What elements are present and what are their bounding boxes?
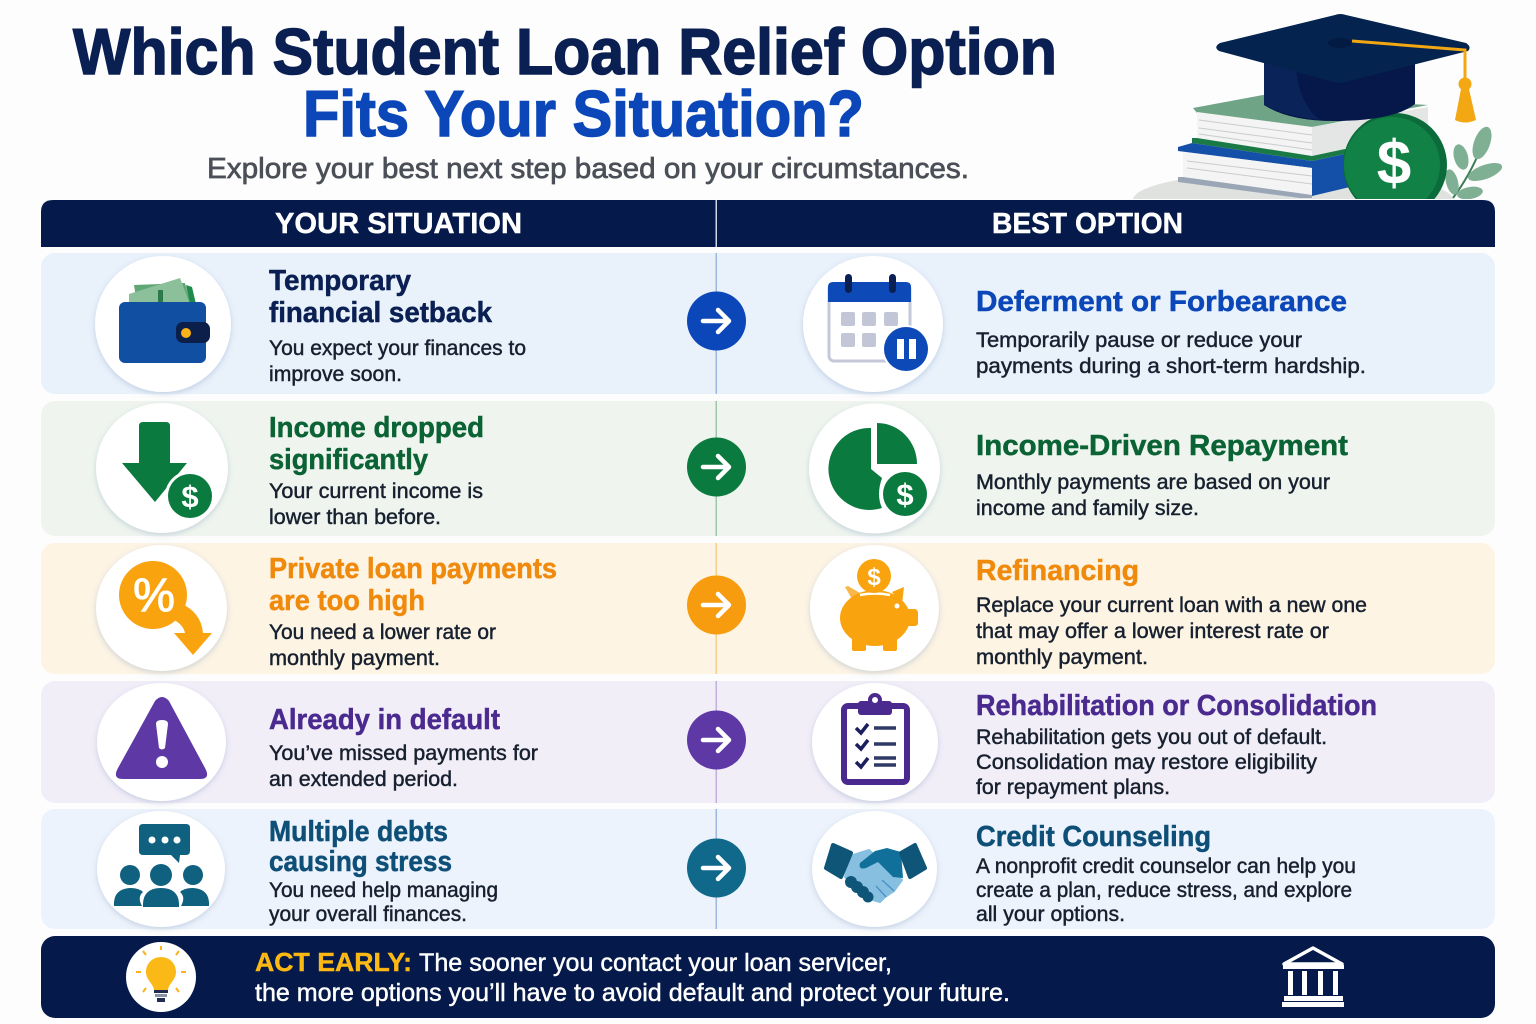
icon: calendar with pause [803,256,943,392]
situation text [269,553,557,670]
situation text: financial setback [269,297,493,329]
situation text: Already in default [269,704,500,736]
situation text: Private loan payments [269,553,557,585]
option text: monthly payment. [976,646,1148,669]
row 5: multiple debts [41,809,1495,929]
option text: that may offer a lower interest rate or [976,620,1329,643]
option text [976,430,1348,520]
icon: pie chart with dollar [809,404,940,534]
top book [1192,95,1428,161]
act early message [255,947,1010,1007]
situation text: an extended period. [269,768,458,791]
situation text: You’ve missed payments for [269,742,538,765]
arrow [687,838,746,898]
option text [976,286,1366,378]
row 1: temporary setback [41,253,1495,394]
icon: warning triangle [97,683,226,801]
option text: Rehabilitation or Consolidation [976,690,1377,722]
situation text [269,412,484,529]
situation text: monthly payment. [269,647,440,670]
icon: percent with arrow: % [133,568,175,621]
icon: pie chart with dollar: $ [896,477,914,512]
situation text: improve soon. [269,363,402,386]
situation text: lower than before. [269,506,441,529]
option text [976,821,1356,926]
option text: Rehabilitation gets you out of default. [976,726,1327,749]
situation text: Temporary [269,265,411,297]
option text: for repayment plans. [976,776,1170,799]
act early message: ACT EARLY: [255,947,412,977]
icon: light bulb [126,942,196,1012]
option text: Monthly payments are based on your [976,471,1330,494]
icon: percent with arrow [96,545,227,671]
icon: wallet [95,256,231,392]
option text: all your options. [976,903,1125,926]
situation text [269,265,526,386]
situation text [269,704,538,791]
option text: Deferment or Forbearance [976,286,1347,318]
arrow [687,710,746,770]
bottom book [1178,143,1350,198]
option text: Refinancing [976,555,1139,587]
option text: Consolidation may restore eligibility [976,751,1318,774]
row 3: private loan payments [41,543,1495,674]
icon: down arrow with dollar [96,403,228,533]
row 2: income dropped [41,401,1495,536]
situation text: Multiple debts [269,816,448,848]
arrow [687,576,746,634]
table header bar [41,200,1495,247]
situation text [269,816,498,926]
situation text: Income dropped [269,412,484,444]
icon: handshake [812,811,937,927]
icon: people with speech bubble [97,811,225,927]
option text: Income-Driven Repayment [976,430,1348,462]
row 4: already in default [41,681,1495,803]
option text [976,555,1367,669]
situation text: You expect your finances to [269,337,526,360]
option text: create a plan, reduce stress, and explore [976,879,1352,902]
icon: piggy bank [810,545,939,671]
option text [976,690,1377,799]
situation text: You need a lower rate or [269,621,496,644]
title: Fits Your Situation? [303,77,864,150]
situation text: are too high [269,585,425,617]
situation text: your overall finances. [269,903,467,926]
illustration: graduation cap, books and coin [1133,14,1502,199]
situation text: significantly [269,444,428,476]
option text: Replace your current loan with a new one [976,594,1367,617]
act early message: the more options you’ll have to avoid default and protect your future. [255,979,1010,1007]
subtitle: Explore your best next step based on your circumstances. [207,153,969,185]
arrow [687,438,746,496]
option text: payments during a short-term hardship. [976,355,1366,378]
situation text: You need help managing [269,879,498,902]
coin: $ [1377,129,1411,198]
option text: Credit Counseling [976,821,1211,853]
act early message: The sooner you contact your loan servicer, [419,949,892,977]
icon: down arrow with dollar: $ [181,479,199,514]
option text: income and family size. [976,497,1199,520]
footer banner: act early [41,936,1495,1018]
column heading: best option: BEST OPTION [992,208,1183,240]
situation text: Your current income is [269,480,483,503]
icon: piggy bank: $ [867,564,881,591]
arrow [687,292,746,350]
situation text: causing stress [269,846,452,878]
title: Which Student Loan Relief Option [73,15,1057,88]
coin [1343,113,1447,199]
graduation cap [1216,14,1476,122]
option text: Temporarily pause or reduce your [976,329,1302,352]
leaves [1445,126,1502,199]
icon: institution building [1282,948,1344,1007]
option text: A nonprofit credit counselor can help you [976,855,1356,878]
title [73,15,1057,150]
column heading: your situation: YOUR SITUATION [275,208,522,240]
icon: checklist clipboard [812,683,938,801]
